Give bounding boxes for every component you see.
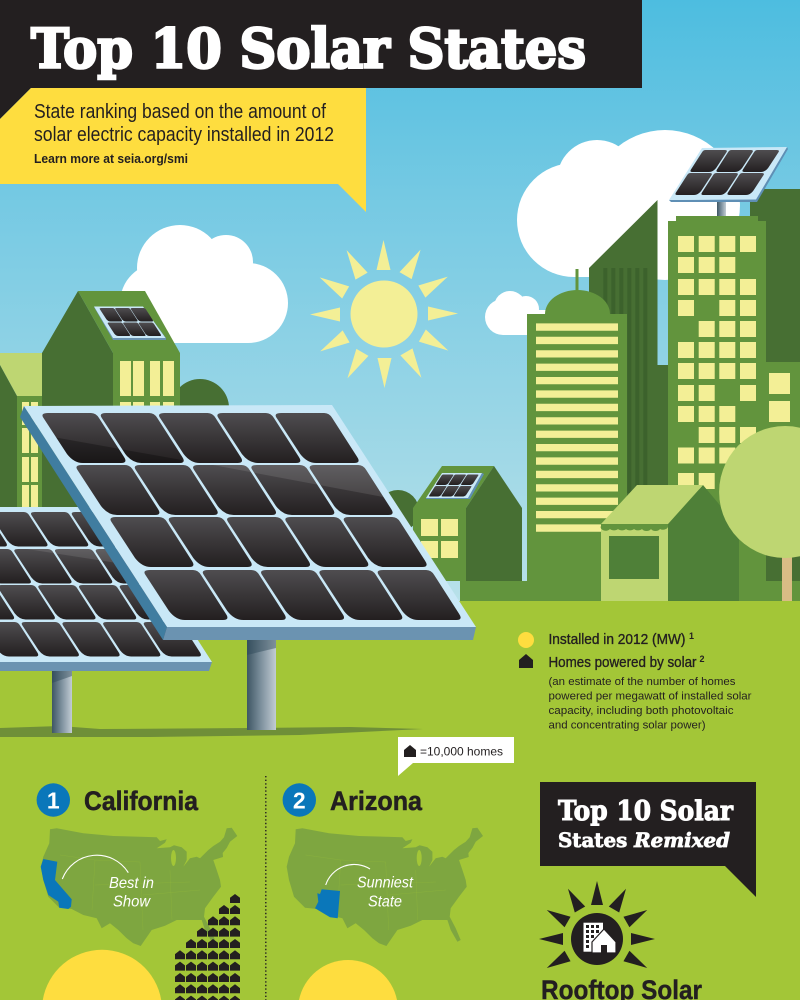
cloud: large right <box>517 130 740 280</box>
rank badge 1: 1 <box>47 788 60 814</box>
building: dome tower <box>527 269 627 581</box>
rooftop solar panel: left house <box>94 306 166 340</box>
rooftop solar panel: centre house <box>426 473 484 499</box>
annotation: Sunniest State: State <box>368 894 402 911</box>
building: far left <box>0 353 42 520</box>
annotation: Best in Show: Best in <box>109 875 154 892</box>
subtitle text <box>34 101 334 166</box>
ground <box>0 601 800 1000</box>
homes pictogram: California <box>175 894 240 1000</box>
subtitle text: Learn more at seia.org/smi <box>34 151 188 166</box>
callout: 10,000 homes key <box>398 737 514 776</box>
building: dark angled tower <box>589 200 668 581</box>
annotation: Sunniest State: Sunniest <box>357 875 413 892</box>
large solar panel <box>20 405 476 640</box>
legend: explanation: (an estimate of the number of homes <box>548 676 736 688</box>
state name: California: California <box>84 786 199 816</box>
remix title line 2: States Remixed <box>558 828 730 852</box>
annotation: Best in Show <box>62 855 154 911</box>
rank 1: California <box>37 783 240 1000</box>
subtitle text: State ranking based on the amount of <box>34 101 326 123</box>
legend: explanation <box>548 676 752 731</box>
cloud: small right <box>485 291 553 335</box>
callout: 10,000 homes key: =10,000 homes <box>420 744 503 758</box>
legend: explanation: powered per megawatt of installed solar <box>548 690 752 702</box>
legend: homes powered: Homes powered by solar <box>548 655 697 671</box>
legend: installed MW: 1 <box>689 631 694 641</box>
solar panel on pole: top right <box>669 147 788 217</box>
title: Top 10 Solar States <box>31 16 586 80</box>
pole: large solar panel <box>247 640 276 730</box>
building: left house <box>42 291 180 520</box>
building: green house <box>668 485 739 601</box>
rank 2: Arizona <box>283 783 483 1000</box>
tree <box>719 426 800 601</box>
installed MW circle: California <box>43 950 161 1000</box>
sun <box>310 240 458 388</box>
legend: homes powered: 2 <box>700 654 705 664</box>
icon: rooftop solar sun <box>539 881 655 973</box>
subtitle callout <box>0 88 366 212</box>
installed MW circle: Arizona <box>299 960 397 1000</box>
panel: Top 10 Solar States Remixed callout <box>540 782 756 897</box>
building: centre house <box>413 466 522 581</box>
ground shadow <box>0 726 423 737</box>
pole: small solar panel <box>52 670 72 733</box>
bush behind left house <box>171 379 229 437</box>
annotation: Sunniest State <box>326 864 413 911</box>
building: tall window tower <box>668 216 766 581</box>
remix title line 1: Top 10 Solar <box>558 796 734 827</box>
building: shop with awning <box>601 485 703 601</box>
header: black title banner <box>0 0 642 119</box>
legend: explanation: capacity, including both photovoltaic <box>548 705 734 717</box>
building: lower right block <box>766 362 800 581</box>
sky background <box>0 0 800 601</box>
subtitle text: solar electric capacity installed in 2012 <box>34 124 334 146</box>
annotation: Best in Show: Show <box>113 894 151 911</box>
legend: installed MW: Installed in 2012 (MW) <box>548 632 686 648</box>
rank badge 1 <box>37 783 70 817</box>
rank badge 2 <box>283 783 316 817</box>
rank badge 2: 2 <box>293 788 306 814</box>
legend: explanation: and concentrating solar power) <box>548 719 706 731</box>
small solar panel <box>0 507 212 671</box>
ground strip behind buildings <box>460 581 800 601</box>
map: California highlighted <box>41 828 237 946</box>
dotted divider <box>265 776 267 1000</box>
legend <box>518 631 752 731</box>
cloud: left <box>120 225 288 343</box>
state name: Arizona: Arizona <box>330 786 423 816</box>
map: Arizona highlighted <box>287 828 483 946</box>
bush behind centre house <box>377 490 419 532</box>
building: right dark tower back <box>750 189 800 389</box>
